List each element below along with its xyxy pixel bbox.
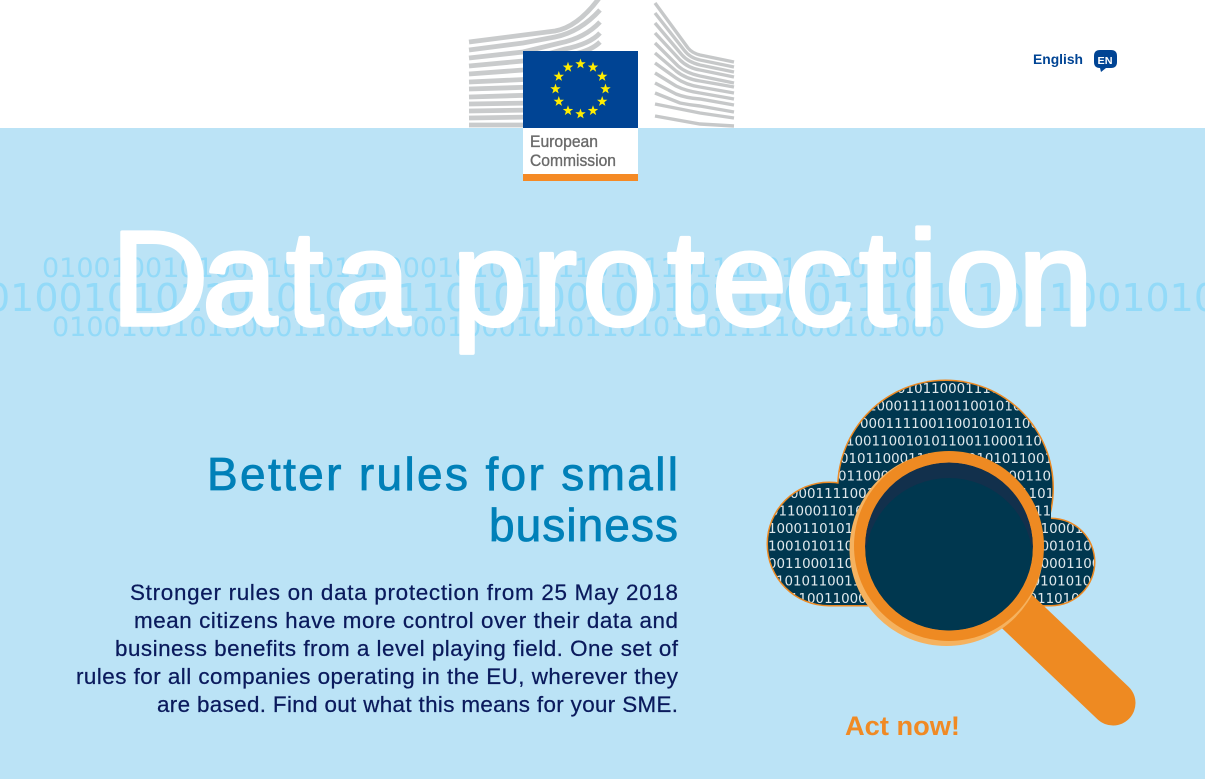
cloud binary data: 100110010101100110001101 [846, 434, 1050, 450]
cloud outline [766, 380, 1096, 606]
illustration: data cloud under magnifying glass [766, 380, 1113, 703]
intro text block: business benefits from a level playing field. One set of [115, 636, 679, 661]
logo orange bar [523, 174, 638, 181]
logo wordmark: European [530, 133, 598, 151]
magnifying glass rim [854, 451, 1044, 641]
language selector [1033, 50, 1117, 72]
cloud binary data: 0011000110101101101011010110101100011000 [768, 557, 1109, 572]
logo: European Commission [523, 51, 638, 181]
logo EU stars [550, 58, 611, 118]
cloud binary data: 00011110011010110001110100111011 [790, 487, 1063, 502]
language label: English [1033, 51, 1083, 67]
magnifying glass rim shadow [850, 452, 1044, 646]
cloud binary data: 0001111001100101011001 [860, 417, 1047, 432]
intro text block: rules for all companies operating in the EU, wherever they [76, 664, 679, 689]
cloud binary data [768, 382, 1109, 607]
icon: language speech bubble: EN [1098, 55, 1112, 67]
heading: Better rules for small [207, 448, 678, 500]
cloud dark fill [768, 381, 1094, 605]
cloud binary data: 1001010110010110101101011010011000101010 [768, 540, 1109, 554]
cloud binary data: 011000110101011011010110010110011001000 [770, 504, 1102, 520]
intro text block [76, 580, 679, 717]
binary code band: 010010010100110101010001010010110101101110010100100 [42, 253, 918, 284]
logo white name panel [523, 128, 638, 174]
heading: business [489, 499, 678, 551]
intro text block: mean citizens have more control over their data and [134, 608, 678, 633]
binary code band: 0100100101000011010100010001010110101101111000101000 [52, 312, 945, 343]
cloud binary data: 110011000110110101101101010101101011 [790, 592, 1097, 607]
cloud binary data: 01010110001110 [880, 382, 999, 397]
icon: Berlaymont building left wing [469, 0, 600, 125]
magnifying glass handle [1005, 600, 1113, 703]
title: Data protection [111, 203, 1093, 354]
logo wordmark [530, 133, 616, 170]
header band [0, 0, 1205, 128]
cloud binary data: 0101100011010110101011001 [840, 452, 1053, 467]
binary code band: 010010101101010001101010010010110001110111011001010 [0, 276, 1205, 320]
cloud binary data: 1000110101011010101101101010100010001000 [768, 522, 1109, 537]
intro text block: Stronger rules on data protection from 25 May 2018 [130, 580, 678, 605]
heading [207, 448, 678, 551]
cloud binary data: 10001111001100101010 [868, 400, 1038, 414]
icon: Berlaymont building right wing [655, 3, 734, 126]
intro text block: are based. Find out what this means for your SME. [157, 692, 678, 717]
cloud binary data: 01100011010101001011001101 [838, 470, 1060, 484]
magnifying glass lens [865, 462, 1033, 646]
binary code band [0, 253, 1205, 343]
logo blue flag panel [523, 51, 638, 128]
logo wordmark: Commission [530, 152, 616, 170]
cloud binary data: 10101100110101011011010110001001010101 [776, 574, 1100, 590]
call to action: Act now! [845, 711, 960, 741]
